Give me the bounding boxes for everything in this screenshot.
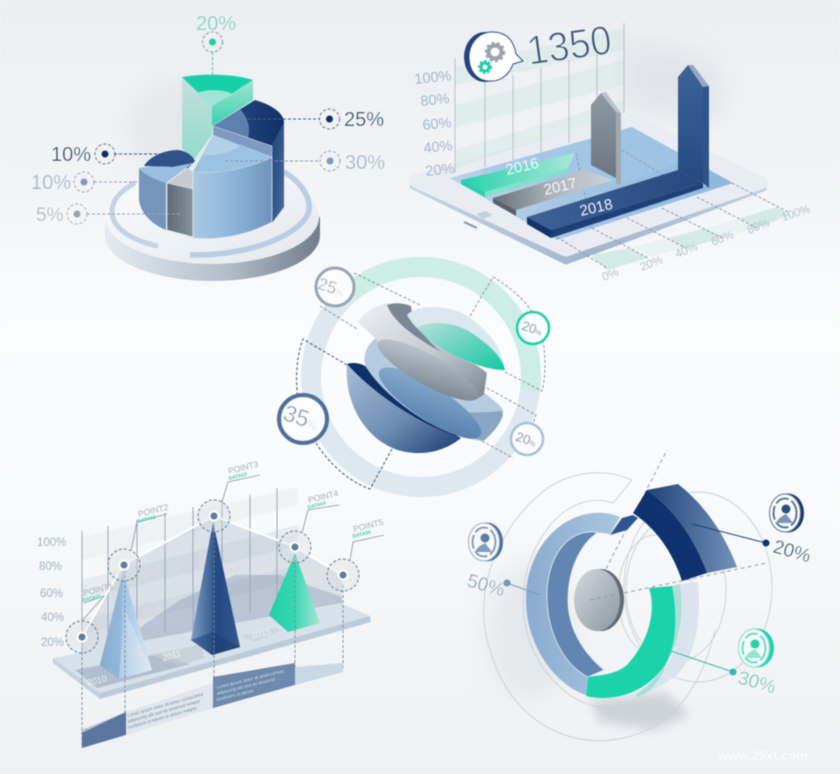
segment: 30% teal: [586, 582, 699, 698]
year labels: 2010: [86, 673, 108, 688]
axis labels: [37, 537, 66, 649]
axis labels y: 60%: [422, 115, 452, 134]
axis labels x: 60%: [710, 229, 735, 249]
icon: badge person 20%: [770, 494, 804, 532]
callout: 30%: [225, 151, 385, 174]
wall grid lines: [82, 488, 277, 653]
point labels: POINT3: [227, 459, 260, 476]
slice: 5% gray: [167, 168, 193, 237]
lower text strips: adipiscing elit sed do eiusmod tempor: [127, 698, 201, 724]
dashed drop lines: [82, 525, 343, 748]
callout: 50%: [465, 571, 540, 601]
lower text strips: Lorem ipsum dolor sit amet consectetur: [127, 691, 204, 718]
point labels: DATA02: [137, 515, 157, 525]
tower: 2018: [678, 65, 709, 188]
bar: 2016: 2016: [504, 155, 540, 179]
pyramid: teal: [269, 553, 320, 632]
callout: 10% light: [31, 172, 140, 194]
axis labels y: 40%: [423, 138, 453, 157]
callout: 5%: [36, 204, 180, 226]
callout: 30%: [668, 650, 778, 698]
callout: 25%: [248, 109, 384, 131]
point labels: DATA03: [228, 472, 248, 482]
axis labels x: [601, 203, 812, 284]
pyramid: navy: [191, 522, 240, 655]
panel: tablet bar chart: [413, 17, 812, 284]
year labels: 2011: [161, 648, 182, 663]
badge: 25%: [315, 268, 354, 306]
badge: 20% teal: [517, 312, 549, 344]
panel: stacked 3D pie chart: [31, 13, 385, 281]
axis labels: 40%: [41, 612, 64, 624]
sphere: middle slice: [364, 338, 503, 450]
segment: 50% blue: [526, 513, 638, 695]
center disc: [574, 569, 624, 631]
callout: 30%: 30%: [345, 152, 385, 174]
dashed segment dividers: [320, 273, 545, 458]
sphere: teal cap: [407, 307, 505, 370]
callout: 20%: 20%: [196, 13, 236, 35]
callout: 10% dark: 10%: [51, 144, 91, 166]
pyramid: light blue: [100, 571, 152, 679]
axis labels y: [414, 68, 455, 180]
callout: 5%: 5%: [36, 205, 64, 226]
dashed axes: [590, 450, 767, 600]
axis labels x: 80%: [746, 217, 771, 237]
panel: pyramid line chart: [37, 459, 385, 748]
axis labels: 60%: [40, 588, 63, 600]
callout: 20%: 20%: [771, 537, 813, 567]
tablet body: [413, 120, 763, 261]
tower: 2017: [591, 92, 621, 184]
point labels: [82, 459, 385, 621]
axis labels x: 40%: [674, 241, 699, 261]
point labels: DATA01: [82, 594, 102, 604]
point labels: POINT1: [82, 581, 115, 598]
bar: 2017: 2017: [542, 175, 578, 199]
dashed 35% outline: [297, 339, 392, 489]
icon: badge person 30%: [738, 628, 774, 668]
floor platform: [53, 603, 371, 699]
bar: 2018: [527, 170, 703, 238]
axis labels: 100%: [37, 537, 66, 549]
watermark: www.25xt.com: [717, 748, 808, 763]
axis labels x: 0%: [601, 266, 621, 284]
lower text strips: incididunt ut labore et dolore magna: [127, 705, 198, 730]
sphere: lower slice: [347, 363, 461, 453]
lower text strips: [82, 663, 343, 748]
callout: 10% dark: [51, 144, 176, 166]
callout: 10% light: 10%: [31, 172, 71, 194]
axis labels y: 100%: [414, 68, 452, 88]
callout: 20%: [692, 524, 813, 567]
wall bands: [82, 487, 298, 635]
soft shadows: [485, 560, 690, 730]
bar: 2016: [461, 153, 575, 197]
data point markers: [66, 500, 359, 653]
point labels: POINT2: [137, 502, 170, 519]
segment: 20% navy: [633, 484, 737, 581]
axis labels: 80%: [39, 561, 62, 573]
callout: 25%: 25%: [344, 109, 384, 131]
badge: 25%: 25%: [315, 274, 347, 301]
thin guide circles: [484, 473, 772, 741]
callout: 30%: 30%: [736, 668, 778, 698]
trend line: [82, 516, 342, 637]
bar: 2017: [493, 170, 613, 216]
slice: 10% dark: [144, 150, 195, 168]
icon: gear speech bubble: [464, 32, 523, 82]
year labels: [86, 626, 272, 688]
lower text strips: incididunt ut labore: [216, 688, 254, 702]
slice: 30% light blue: [193, 135, 272, 239]
slice: 25% navy: [213, 100, 284, 223]
slice: 10% light: [139, 163, 193, 230]
badge: 35%: 35%: [280, 400, 322, 435]
icon: badge person 50%: [468, 522, 503, 562]
badge: 35%: [279, 395, 327, 443]
callout: 20%: [196, 13, 236, 76]
axis grid and bands: [557, 150, 790, 270]
back wall grid: [455, 23, 624, 173]
point labels: POINT4: [307, 488, 340, 505]
lower text strips: Lorem ipsum dolor sit amet consec: [216, 668, 286, 690]
pie base platform: [105, 170, 320, 281]
panel: 3D donut chart: [465, 450, 813, 741]
panel: sphere chart: [279, 267, 549, 489]
badge: 20% teal: 20%: [520, 318, 544, 339]
badge: 20% blue: [511, 423, 543, 455]
year labels: 2015: [250, 626, 272, 641]
sphere: upper slice: [358, 303, 487, 411]
callout: 50%: 50%: [465, 571, 507, 601]
big number 1350: 1350: [524, 17, 614, 74]
badge: 20% blue: 20%: [514, 429, 538, 450]
point labels: DATA05: [352, 530, 372, 540]
axis labels: 20%: [41, 637, 64, 649]
point labels: DATA04: [307, 501, 327, 511]
axis labels y: 80%: [420, 91, 450, 110]
bar: 2018: 2018: [578, 196, 614, 220]
axis labels y: 20%: [425, 161, 455, 180]
area under line: [82, 516, 342, 670]
ring track: [311, 267, 531, 487]
point labels: POINT5: [352, 517, 385, 534]
slice: 20% teal: [182, 75, 253, 161]
axis labels x: 100%: [780, 203, 812, 224]
axis labels x: 20%: [639, 254, 664, 274]
lower text strips: adipiscing elit sed do eiusmod: [216, 676, 276, 696]
